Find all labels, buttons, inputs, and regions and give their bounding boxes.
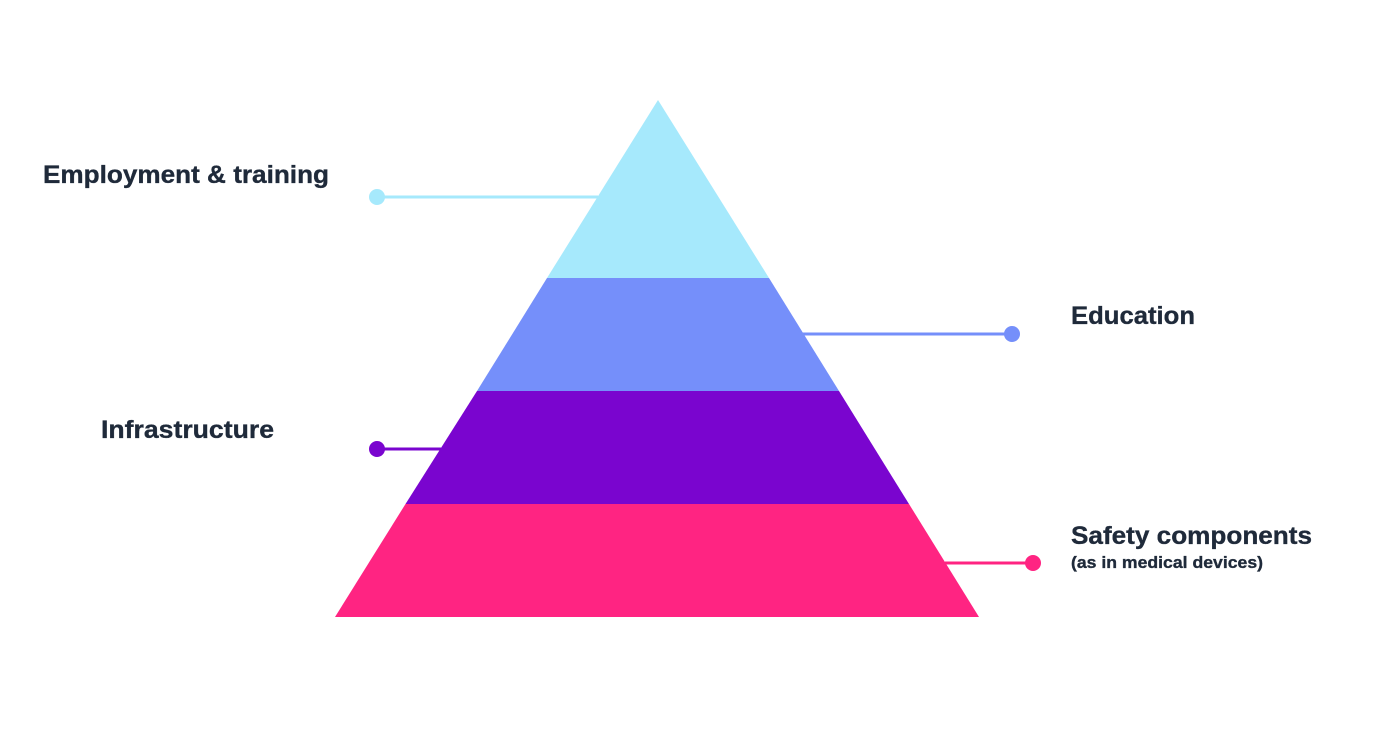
connector: safety components: [945, 555, 1041, 571]
label: safety components: Safety components: [1071, 522, 1312, 550]
label: employment and training: Employment & training: [43, 161, 329, 189]
pyramid tier: safety components: [335, 504, 979, 617]
label: education: Education: [1071, 302, 1195, 330]
label: safety components: [1071, 522, 1312, 572]
connector: employment and training: [369, 189, 598, 205]
connector: education: [802, 326, 1020, 342]
pyramid tier: employment and training: [547, 100, 769, 278]
pyramid tier: infrastructure: [406, 391, 909, 504]
pyramid tier: education: [477, 278, 839, 391]
connector: infrastructure: [369, 441, 441, 457]
label note: as in medical devices: (as in medical devices): [1071, 554, 1263, 572]
label: infrastructure: Infrastructure: [101, 416, 274, 444]
